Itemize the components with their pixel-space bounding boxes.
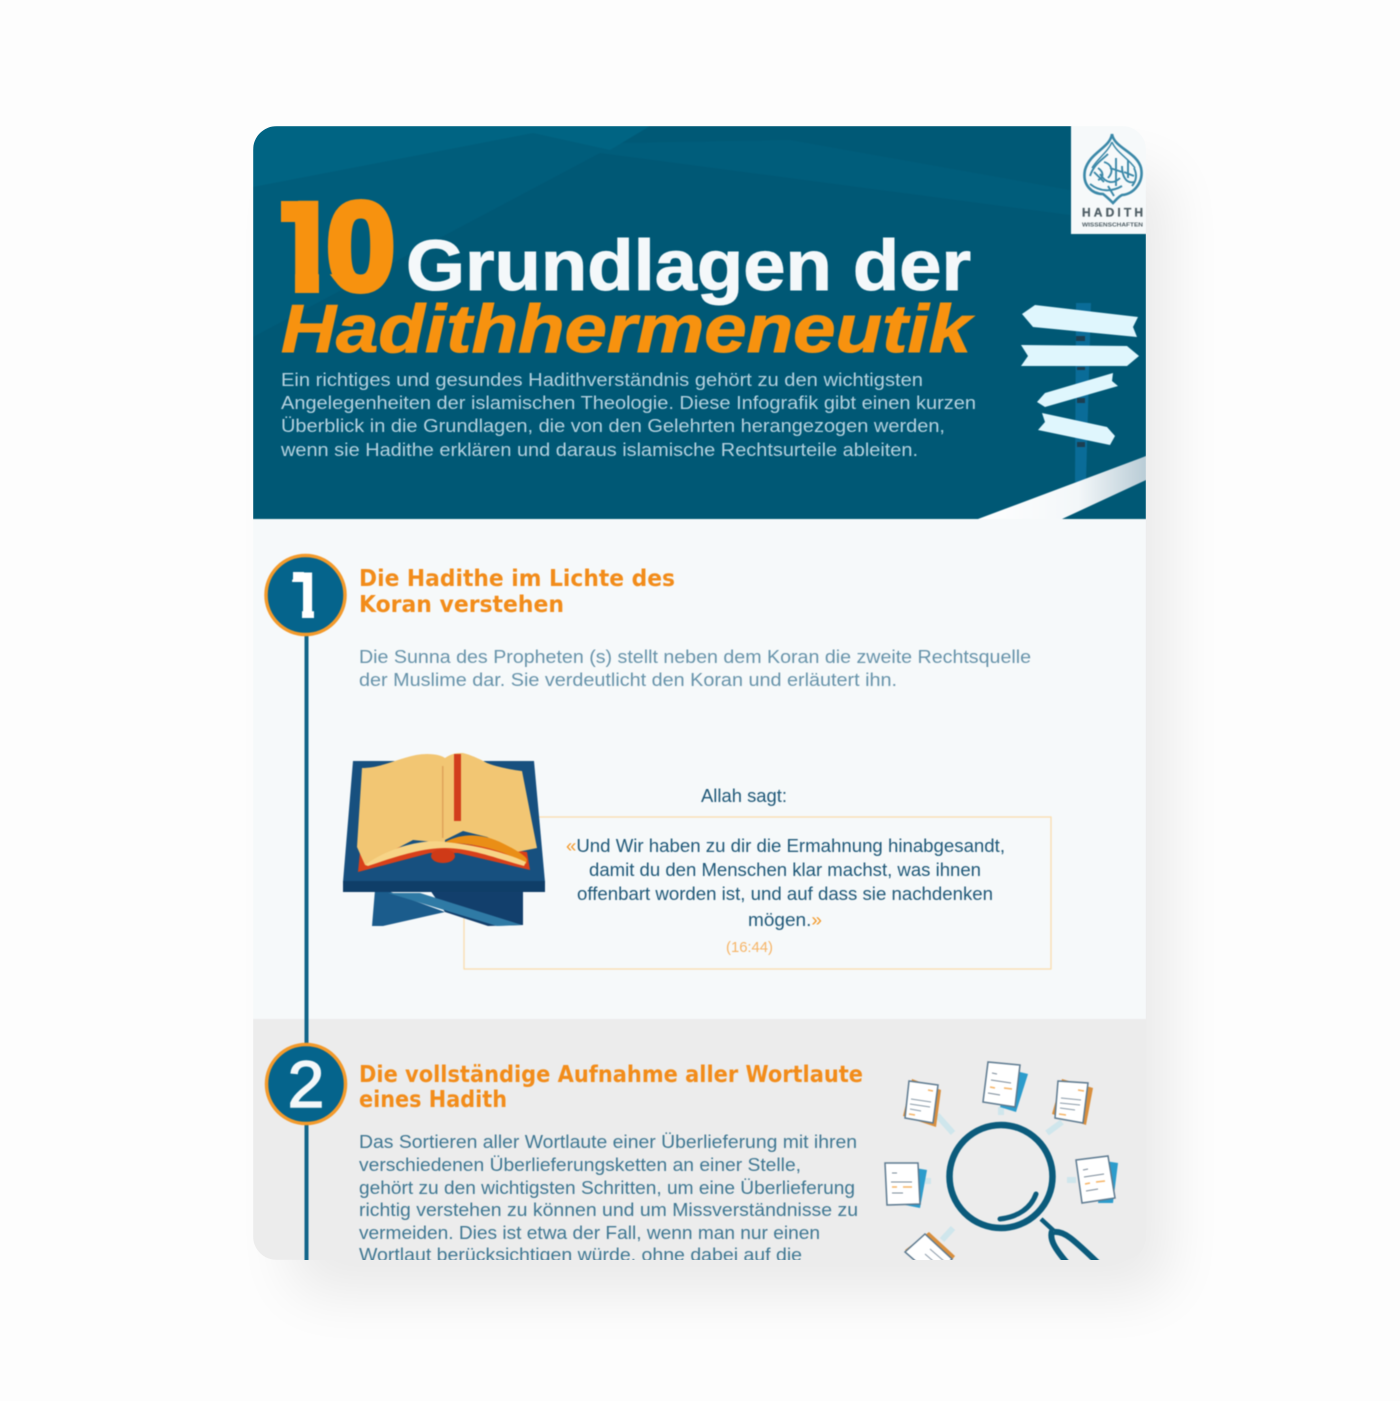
- heading 1: Die Hadithe im Lichte des: [359, 566, 675, 592]
- logo wordmark: HADITH: [1082, 206, 1143, 220]
- title number: 10: [269, 178, 396, 317]
- document top left: [903, 1079, 941, 1127]
- heading 1: [360, 568, 675, 614]
- intro text: wenn sie Hadithe erklären und daraus islamische Rechtsurteile ableiten.: [280, 439, 918, 460]
- logo subline: WISSENSCHAFTEN: [1082, 222, 1143, 228]
- icon: signpost: [1021, 303, 1139, 482]
- infographic card: [253, 126, 1146, 1278]
- callout: quote box: (16:44): [726, 939, 773, 956]
- text block 1: der Muslime dar. Sie verdeutlicht den Koran und erläutert ihn.: [359, 669, 897, 690]
- heading 2: eines Hadith: [359, 1087, 507, 1113]
- quote label: Allah sagt:: [701, 785, 787, 806]
- heading 1: Koran verstehen: [359, 592, 564, 618]
- text block 2: verschiedenen Überlieferungsketten an einer Stelle,: [359, 1154, 801, 1175]
- text block 2: vermeiden. Dies ist etwa der Fall, wenn man nur einen: [359, 1222, 820, 1243]
- callout: quote box: mögen.»: [748, 909, 822, 930]
- intro text: Ein richtiges und gesundes Hadithverständnis gehört zu den wichtigsten: [281, 369, 923, 390]
- icon: open book on stand: [343, 753, 545, 926]
- document top right: [1052, 1079, 1093, 1125]
- heading 2: Die vollständige Aufnahme aller Wortlaute: [359, 1062, 863, 1088]
- panel: section 1: [266, 556, 1051, 969]
- panel: section 1 background: [253, 519, 1146, 1019]
- document left: [885, 1163, 927, 1208]
- decorative white stripe: [978, 456, 1146, 519]
- number badge 2: [266, 1044, 346, 1124]
- intro text: Angelegenheiten der islamischen Theologie. Diese Infografik gibt einen kurzen: [281, 392, 976, 413]
- title line 1: Grundlagen der: [406, 227, 971, 306]
- text block 1: [359, 648, 1031, 687]
- timeline line: [304, 632, 308, 1262]
- document right: [1076, 1156, 1118, 1203]
- number badge 1: 1: [288, 558, 324, 632]
- callout: quote box: offenbart worden ist, und auf dass sie nachdenken: [577, 883, 993, 904]
- panel: section 2: [266, 1044, 1118, 1278]
- text block 2: [359, 1131, 858, 1265]
- number badge 1: [266, 556, 345, 634]
- title line 2: Hadithhermeneutik: [281, 291, 975, 367]
- logo: [1071, 126, 1146, 234]
- text block 2: Wortlaut berücksichtigen würde, ohne dabei auf die: [359, 1244, 802, 1265]
- icon: magnifier with documents: [885, 1062, 1118, 1278]
- magnifier: [950, 1125, 1098, 1264]
- intro text: [280, 369, 976, 460]
- text block 2: gehört zu den wichtigsten Schritten, um eine Überlieferung: [359, 1177, 855, 1198]
- icon: calligraphy drop: [1084, 134, 1142, 203]
- document bottom: [904, 1232, 956, 1260]
- callout: quote box: «Und Wir haben zu dir die Ermahnung hinabgesandt,: [566, 835, 1005, 856]
- pointer marks: [925, 1107, 1076, 1240]
- callout: quote box: damit du den Menschen klar machst, was ihnen: [589, 859, 981, 880]
- number badge 2: 2: [288, 1047, 324, 1121]
- card shadow: [290, 170, 1170, 1295]
- text block 2: richtig verstehen zu können und um Missverständnisse zu: [359, 1199, 858, 1220]
- heading 2: [359, 1063, 863, 1108]
- panel: section 2 background: [253, 1019, 291, 1260]
- text block 2: Das Sortieren aller Wortlaute einer Überlieferung mit ihren: [359, 1131, 857, 1152]
- document top centre: [983, 1062, 1028, 1112]
- panel: header banner: [253, 126, 1146, 519]
- title number: [280, 198, 394, 295]
- text block 1: Die Sunna des Propheten (s) stellt neben dem Koran die zweite Rechtsquelle: [359, 646, 1031, 667]
- callout: quote box: [464, 817, 1051, 969]
- intro text: Überblick in die Grundlagen, die von den Gelehrten herangezogen werden,: [281, 415, 945, 436]
